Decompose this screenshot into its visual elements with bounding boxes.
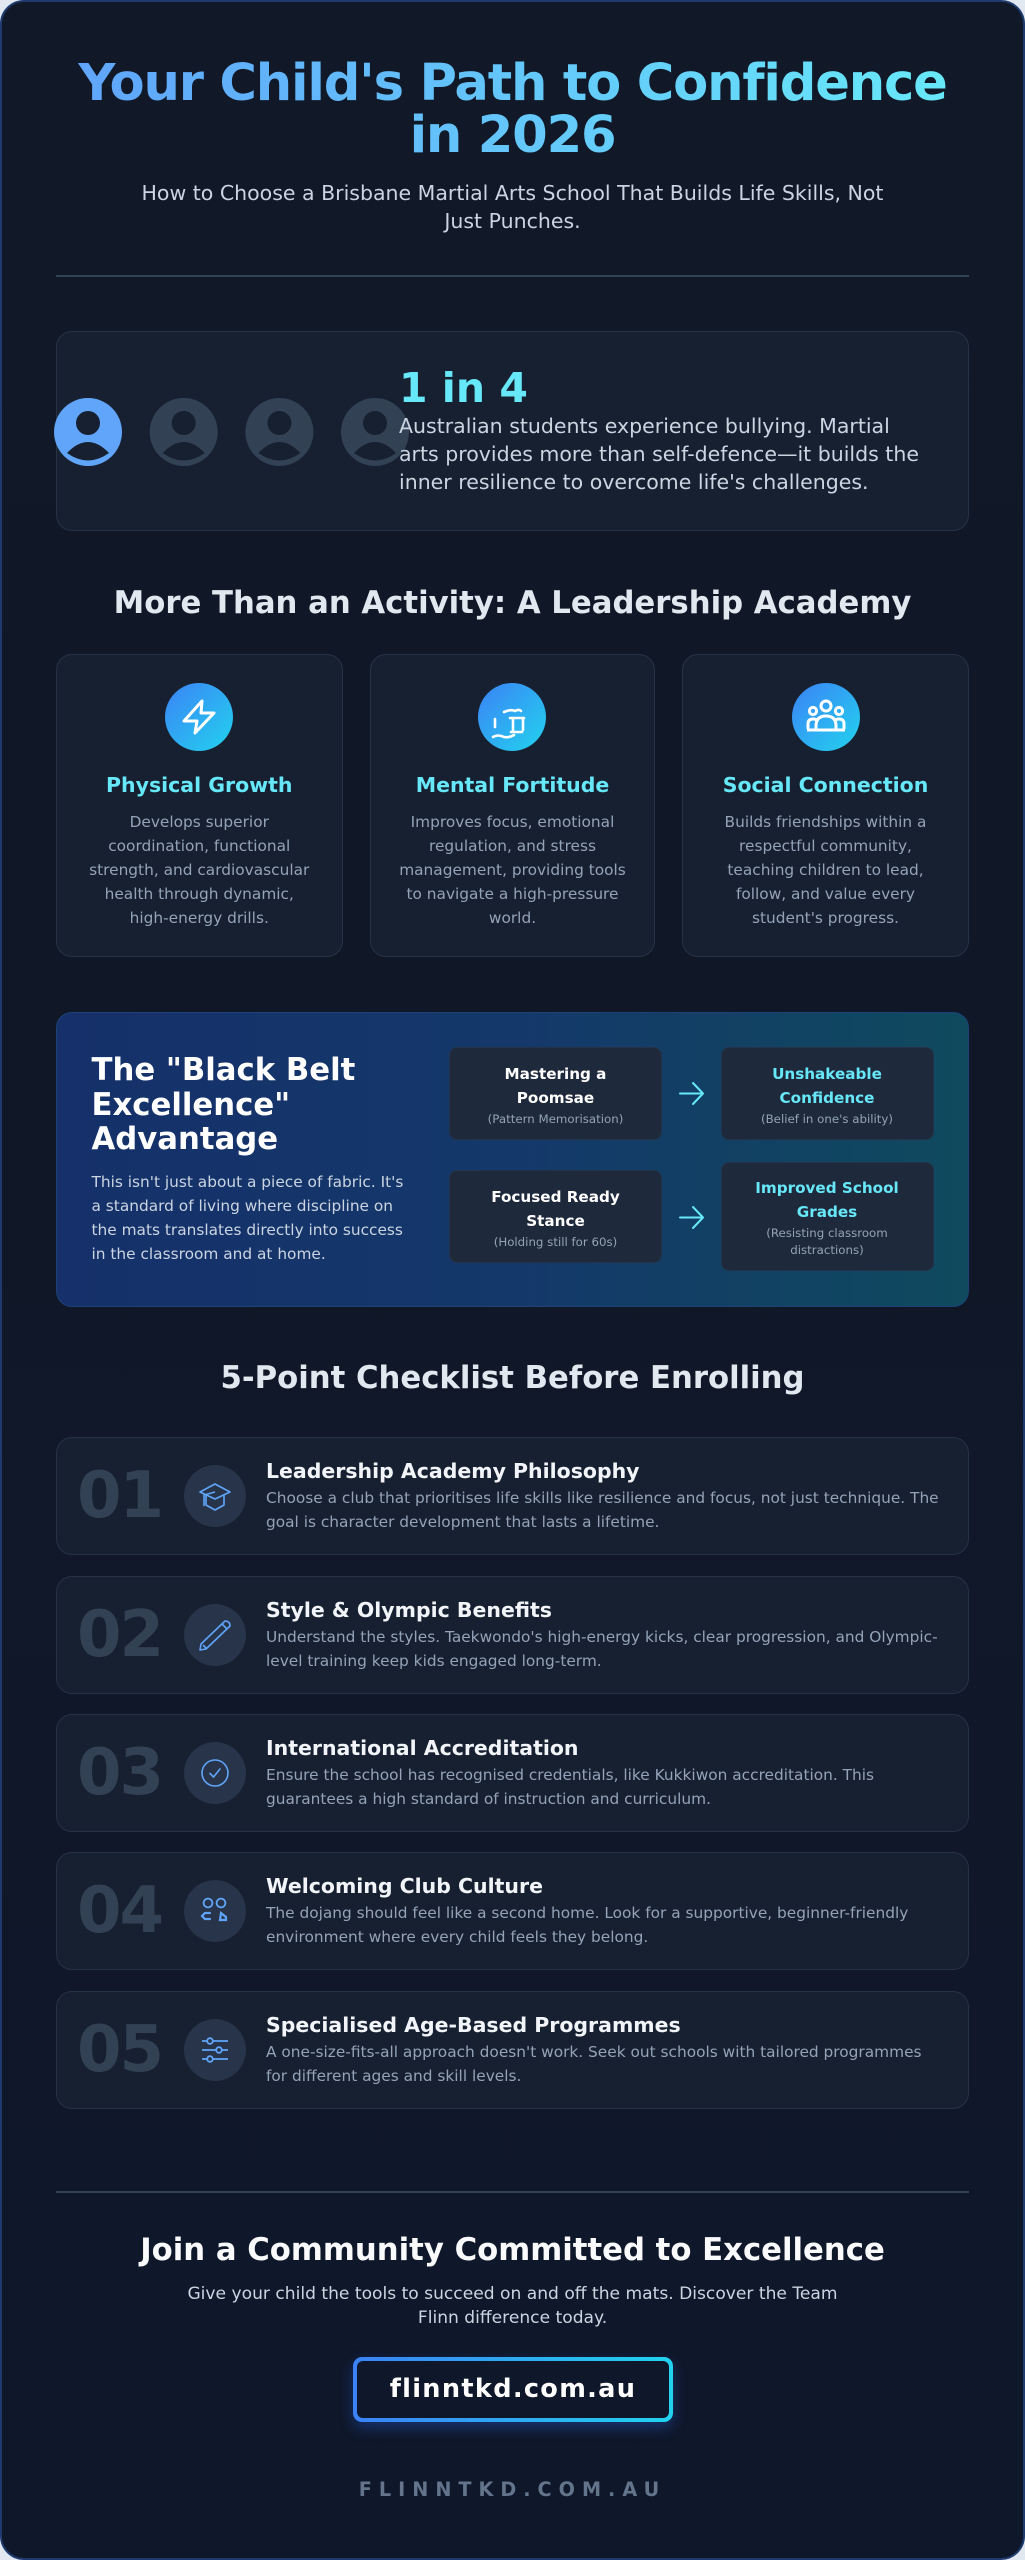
- arrow: [679, 1082, 704, 1105]
- panel heading: The "Black Belt: [92, 1052, 355, 1088]
- effect box: improved school grades: [720, 1162, 934, 1271]
- panel heading: [92, 1052, 355, 1157]
- card text: high-energy drills.: [130, 909, 269, 927]
- checklist item 04: [56, 1852, 969, 1970]
- item title: Specialised Age-Based Programmes: [266, 2013, 681, 2037]
- icon: lightning bolt: [165, 683, 233, 751]
- effect box: unshakeable confidence: (Belief in one's ability): [761, 1112, 893, 1126]
- item description: environment where every child feels they belong.: [266, 1928, 648, 1946]
- card text: Develops superior: [130, 813, 269, 831]
- icon: check circle: [184, 1742, 246, 1804]
- effect box: improved school grades: distractions): [790, 1243, 864, 1257]
- subtitle: Just Punches.: [444, 208, 581, 232]
- item description: Understand the styles. Taekwondo's high-energy kicks, clear progression, and Olympic-: [266, 1628, 938, 1646]
- card text: Improves focus, emotional: [411, 813, 614, 831]
- card text: health through dynamic,: [105, 885, 294, 903]
- card title: Social Connection: [723, 773, 928, 797]
- panel: 1 in 4 statistic: [56, 331, 969, 531]
- panel paragraph: a standard of living where discipline on: [92, 1197, 393, 1215]
- effect box: improved school grades: Grades: [797, 1203, 857, 1221]
- checklist item 05: [56, 1991, 969, 2109]
- cause box: focused ready stance: Focused Ready: [491, 1188, 620, 1206]
- panel: physical growth: [56, 654, 342, 957]
- card text: regulation, and stress: [429, 837, 596, 855]
- panel heading: Advantage: [92, 1121, 278, 1157]
- panel paragraph: This isn't just about a piece of fabric. It's: [92, 1173, 403, 1191]
- panel: mental fortitude: [370, 654, 655, 957]
- item title: Leadership Academy Philosophy: [266, 1459, 640, 1483]
- icon: person 4: [341, 398, 409, 466]
- card text: coordination, functional: [108, 837, 290, 855]
- card title: Mental Fortitude: [416, 773, 609, 797]
- icon: person 3: [245, 398, 313, 466]
- icon: sliders: [184, 2019, 246, 2081]
- icon: group of people: [792, 683, 860, 751]
- card text: [399, 813, 626, 927]
- item description: Ensure the school has recognised credentials, like Kukkiwon accreditation. This: [266, 1766, 874, 1784]
- cause box: focused ready stance: (Holding still for 60s): [494, 1235, 617, 1249]
- stat description: Australian students experience bullying. Martial: [399, 414, 890, 438]
- item description: [266, 1628, 938, 1670]
- effect box: improved school grades: Improved School: [755, 1179, 899, 1197]
- footer paragraph: [187, 2284, 838, 2328]
- heading: leadership academy: More Than an Activity: A Leadership Academy: [114, 585, 911, 621]
- card text: [89, 813, 310, 927]
- item title: International Accreditation: [266, 1736, 579, 1760]
- footer paragraph: Give your child the tools to succeed on and off the mats. Discover the Team: [187, 2284, 838, 2304]
- icon: brain glyph: [478, 683, 546, 751]
- footer heading: Join a Community Committed to Excellence: [140, 2232, 885, 2268]
- icon: highlighted person: [54, 398, 122, 466]
- effect box: unshakeable confidence: Confidence: [780, 1089, 874, 1107]
- card text: Builds friendships within a: [725, 813, 926, 831]
- checklist item 02: [56, 1576, 969, 1694]
- card text: to navigate a high-pressure: [406, 885, 618, 903]
- card text: teaching children to lead,: [727, 861, 924, 879]
- stat description: inner resilience to overcome life's challenges.: [399, 470, 869, 494]
- item description: goal is character development that lasts a lifetime.: [266, 1513, 659, 1531]
- call to action button: flinntkd.com.au: [390, 2374, 636, 2404]
- item description: [266, 1766, 874, 1808]
- number: 05: [77, 2013, 162, 2087]
- cause box: focused ready stance: Stance: [526, 1212, 585, 1230]
- item description: [266, 2043, 922, 2085]
- heading: checklist: 5-Point Checklist Before Enrolling: [220, 1360, 805, 1396]
- cause box: mastering a poomsae: (Pattern Memorisation): [488, 1112, 623, 1126]
- icon: pencil: [184, 1604, 246, 1666]
- item description: level training keep kids engaged long-term.: [266, 1652, 602, 1670]
- card text: student's progress.: [752, 909, 899, 927]
- panel paragraph: [91, 1173, 403, 1263]
- card text: respectful community,: [739, 837, 912, 855]
- footer url: FLINNTKD.COM.AU: [359, 2478, 666, 2501]
- stat number: 1 in 4: [399, 364, 528, 412]
- title: [0, 57, 1025, 161]
- panel: black belt excellence: [56, 1012, 969, 1307]
- number: 03: [77, 1736, 162, 1810]
- number: 02: [77, 1598, 162, 1672]
- stat description: [399, 414, 919, 494]
- subtitle: How to Choose a Brisbane Martial Arts School That Builds Life Skills, Not: [142, 181, 883, 205]
- card text: follow, and value every: [736, 885, 915, 903]
- panel paragraph: the mats translates directly into success: [92, 1221, 403, 1239]
- effect box: unshakeable confidence: [720, 1047, 934, 1140]
- panel paragraph: in the classroom and at home.: [92, 1245, 326, 1263]
- item description: [266, 1489, 939, 1531]
- icon: graduation cap: [184, 1465, 246, 1527]
- card text: management, providing tools: [399, 861, 626, 879]
- item title: Style & Olympic Benefits: [266, 1598, 552, 1622]
- number: 01: [77, 1459, 162, 1533]
- item description: [266, 1904, 908, 1946]
- item description: A one-size-fits-all approach doesn't work. Seek out schools with tailored programmes: [266, 2043, 922, 2061]
- icon: person 2: [150, 398, 218, 466]
- subtitle: [142, 181, 883, 232]
- item description: Choose a club that prioritises life skills like resilience and focus, not just technique. The: [266, 1489, 939, 1507]
- item description: The dojang should feel like a second home. Look for a supportive, beginner-friendly: [266, 1904, 908, 1922]
- cause box: mastering a poomsae: Mastering a: [505, 1065, 606, 1083]
- checklist item 01: [56, 1437, 969, 1555]
- arrow: [679, 1206, 704, 1229]
- title: in 2026: [410, 105, 615, 165]
- footer paragraph: Flinn difference today.: [418, 2308, 607, 2328]
- item description: guarantees a high standard of instruction and curriculum.: [266, 1790, 711, 1808]
- card text: strength, and cardiovascular: [89, 861, 309, 879]
- card text: [725, 813, 926, 927]
- panel heading: Excellence": [92, 1086, 290, 1122]
- checklist item 03: [56, 1714, 969, 1832]
- panel: social connection: [682, 654, 969, 957]
- number: 04: [77, 1874, 162, 1948]
- effect box: unshakeable confidence: Unshakeable: [772, 1065, 882, 1083]
- cause box: mastering a poomsae: [449, 1047, 662, 1140]
- call to action button: [353, 2357, 673, 2422]
- item description: for different ages and skill levels.: [266, 2067, 521, 2085]
- item title: Welcoming Club Culture: [266, 1874, 543, 1898]
- card title: Physical Growth: [106, 773, 292, 797]
- title: Your Child's Path to Confidence: [78, 53, 947, 113]
- icon group: four people, one highlighted: [54, 398, 409, 466]
- cause box: mastering a poomsae: Poomsae: [517, 1089, 594, 1107]
- card text: world.: [489, 909, 536, 927]
- icon: community: [184, 1880, 246, 1942]
- cause box: focused ready stance: [449, 1170, 662, 1263]
- stat description: arts provides more than self-defence—it builds the: [399, 442, 919, 466]
- effect box: improved school grades: (Resisting classroom: [766, 1226, 888, 1240]
